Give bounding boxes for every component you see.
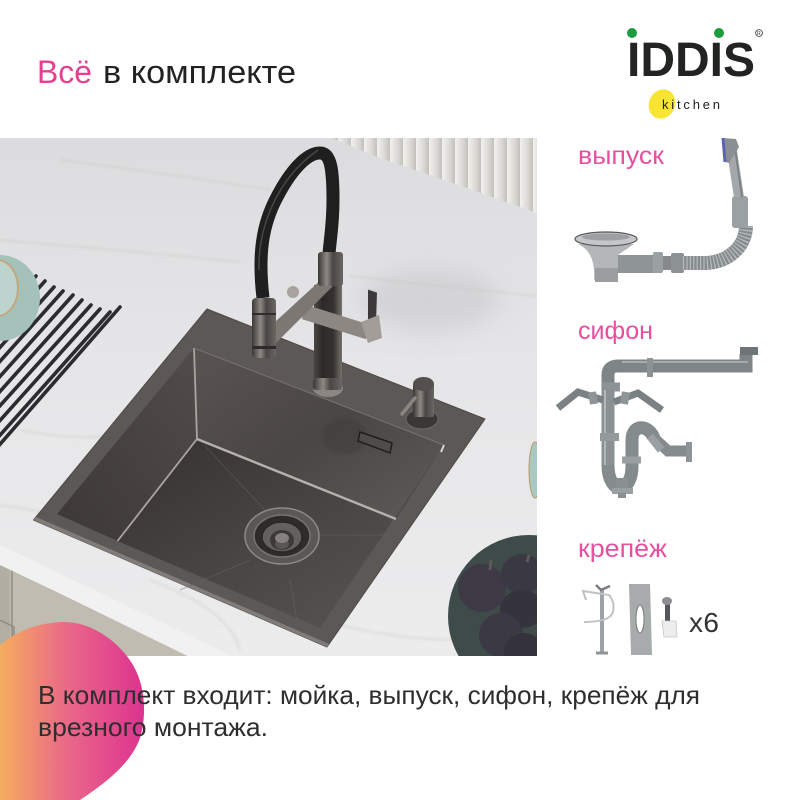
illustration: mounting hardware bbox=[583, 584, 719, 655]
title: в комплекте bbox=[103, 54, 296, 90]
bowl of figs bbox=[448, 535, 537, 656]
back basin wall bbox=[196, 364, 426, 496]
logo: IDDIS kitchen: IDDIS bbox=[627, 34, 755, 87]
handle bbox=[304, 289, 382, 343]
upper collar bbox=[318, 252, 343, 286]
swing arm bbox=[276, 282, 333, 343]
caption bbox=[38, 680, 700, 742]
basin floor bbox=[118, 439, 444, 628]
drying rack bbox=[0, 274, 122, 447]
faucet bbox=[252, 150, 382, 397]
hose bbox=[261, 153, 333, 298]
corrugated hose bbox=[683, 226, 746, 263]
plates bbox=[0, 255, 541, 498]
caption: В комплект входит: мойка, выпуск, сифон, крепёж для bbox=[38, 680, 700, 710]
label: сифон: сифон bbox=[578, 317, 653, 345]
clamp bolt bbox=[583, 585, 614, 653]
illustration: siphon bbox=[558, 351, 758, 498]
wall and upper counter shading bbox=[0, 138, 537, 650]
title: Всё bbox=[37, 54, 92, 90]
gradient blob bbox=[0, 622, 144, 800]
sink bbox=[34, 309, 485, 647]
side inlets bbox=[558, 392, 603, 408]
trap bbox=[608, 428, 654, 488]
logo plate bbox=[358, 432, 392, 453]
illustration: sink outlet bbox=[575, 138, 748, 282]
logo: IDDIS kitchen: R bbox=[757, 31, 761, 37]
overflow head bbox=[723, 138, 739, 163]
lower collar bbox=[252, 298, 276, 358]
logo: IDDIS kitchen bbox=[627, 28, 762, 123]
left basin wall bbox=[57, 348, 197, 541]
bracket bbox=[629, 584, 652, 655]
title bbox=[37, 54, 296, 90]
quantity: x6 bbox=[689, 607, 719, 638]
screw bbox=[662, 597, 677, 637]
photo: kitchen sink on marble counter bbox=[0, 138, 537, 656]
logo: IDDIS kitchen: kitchen bbox=[662, 97, 720, 112]
drain bbox=[245, 508, 319, 564]
label: выпуск: выпуск bbox=[578, 142, 665, 170]
label: крепёж: крепёж bbox=[578, 535, 667, 563]
cabinet below counter bbox=[0, 565, 187, 656]
soap dispenser bbox=[402, 377, 438, 429]
caption: врезного монтажа. bbox=[38, 712, 268, 742]
